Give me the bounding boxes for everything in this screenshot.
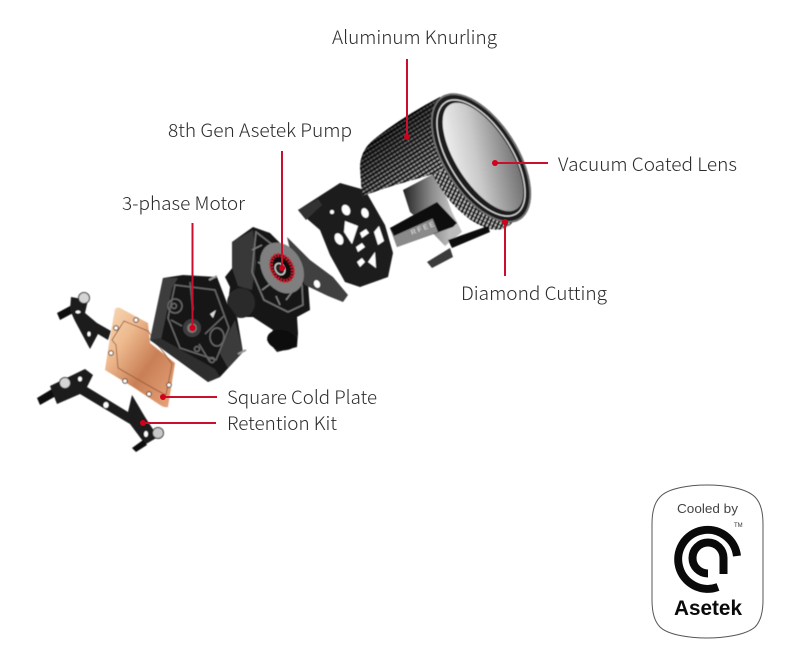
- label: cold plate: Square Cold Plate: [227, 384, 377, 410]
- badge caption: Cooled by: [677, 501, 739, 516]
- rear knurled cylinder: [360, 97, 470, 196]
- label: retention kit: Retention Kit: [227, 410, 337, 436]
- Asetek logo mark: [678, 530, 737, 589]
- lens ring: [411, 77, 551, 239]
- leader: aluminum knurling: [404, 59, 410, 140]
- lower ring shadow: [448, 226, 490, 248]
- badge: cooled by Asetek: [652, 485, 763, 638]
- tab markings: R F E E: [410, 221, 436, 237]
- pump housing: [225, 227, 348, 352]
- badge wordmark: Asetek: [674, 597, 742, 620]
- rear retention bracket: [57, 292, 111, 349]
- leader: motor: [190, 223, 196, 331]
- sensor tab: [390, 202, 457, 247]
- lens assembly: [360, 77, 551, 268]
- trademark: TM: [734, 523, 743, 529]
- copper cold plate: [105, 308, 175, 407]
- label: motor: 3-phase Motor: [122, 190, 245, 216]
- leader: cold plate: [160, 394, 217, 400]
- label: vacuum coated lens: Vacuum Coated Lens: [558, 151, 737, 177]
- motor block: [150, 275, 246, 382]
- front retention bracket: [37, 369, 164, 452]
- clip: [427, 248, 453, 268]
- leader: retention kit: [140, 420, 216, 426]
- leader: pump: [279, 151, 285, 271]
- leader: vacuum coated lens: [492, 160, 548, 166]
- label: diamond cutting: Diamond Cutting: [461, 280, 607, 306]
- cover plate: [287, 237, 348, 302]
- leader: diamond cutting: [502, 219, 508, 276]
- lens glass: [427, 90, 539, 224]
- mount metal bracket: [403, 172, 462, 246]
- front knurled band: [400, 86, 538, 246]
- circuit plate: [298, 183, 393, 287]
- label: aluminum knurling: Aluminum Knurling: [332, 24, 497, 50]
- label: pump: 8th Gen Asetek Pump: [168, 117, 352, 143]
